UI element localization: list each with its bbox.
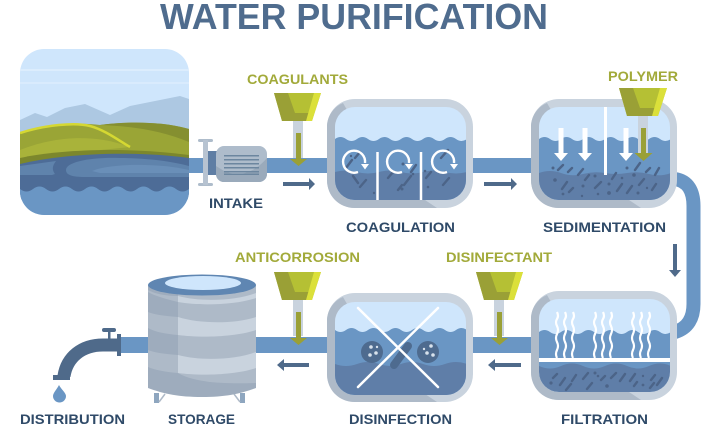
label: polymer: POLYMER	[608, 68, 678, 84]
icon: storage tank	[148, 274, 256, 403]
label: sedimentation: SEDIMENTATION	[543, 219, 666, 235]
label: filtration: FILTRATION	[561, 411, 648, 427]
icon: tap	[53, 328, 121, 380]
funnel: disinfectant	[476, 272, 523, 345]
settling arrows	[554, 128, 633, 161]
dividers	[378, 152, 421, 200]
label: coagulation: COAGULATION	[346, 219, 455, 235]
icon: water drop	[53, 385, 66, 403]
cross	[358, 308, 438, 387]
funnel: coagulants	[274, 93, 321, 166]
microbes	[361, 341, 439, 365]
funnel: anticorrosion	[274, 272, 321, 345]
label: coagulants: COAGULANTS	[247, 71, 348, 87]
icon: intake pump	[198, 139, 267, 186]
funnel: polymer	[619, 88, 667, 161]
panel: coagulation tank	[327, 99, 473, 208]
divider	[604, 107, 607, 175]
label: disinfectant: DISINFECTANT	[446, 249, 552, 265]
panel: filtration tank	[531, 291, 677, 400]
arrow: disinfection to storage	[277, 359, 309, 371]
filter membrane	[539, 358, 670, 362]
panel: water source landscape	[20, 49, 189, 215]
label: anticorrosion: ANTICORROSION	[235, 249, 360, 265]
label: disinfection: DISINFECTION	[349, 411, 452, 427]
filtered water streams	[556, 312, 650, 358]
arrow: intake to coagulation	[283, 178, 315, 190]
swirl arrows	[343, 151, 458, 173]
arrow: sedimentation to filtration	[669, 244, 681, 277]
label: storage: STORAGE	[168, 411, 235, 427]
arrow: filtration to disinfection	[488, 359, 521, 371]
pipes	[119, 158, 694, 353]
panel: disinfection tank	[327, 293, 473, 402]
panel: sedimentation tank	[531, 99, 677, 208]
arrow: coagulation to sedimentation	[484, 178, 517, 190]
label: intake: INTAKE	[209, 195, 263, 211]
label: distribution: DISTRIBUTION	[20, 411, 125, 427]
